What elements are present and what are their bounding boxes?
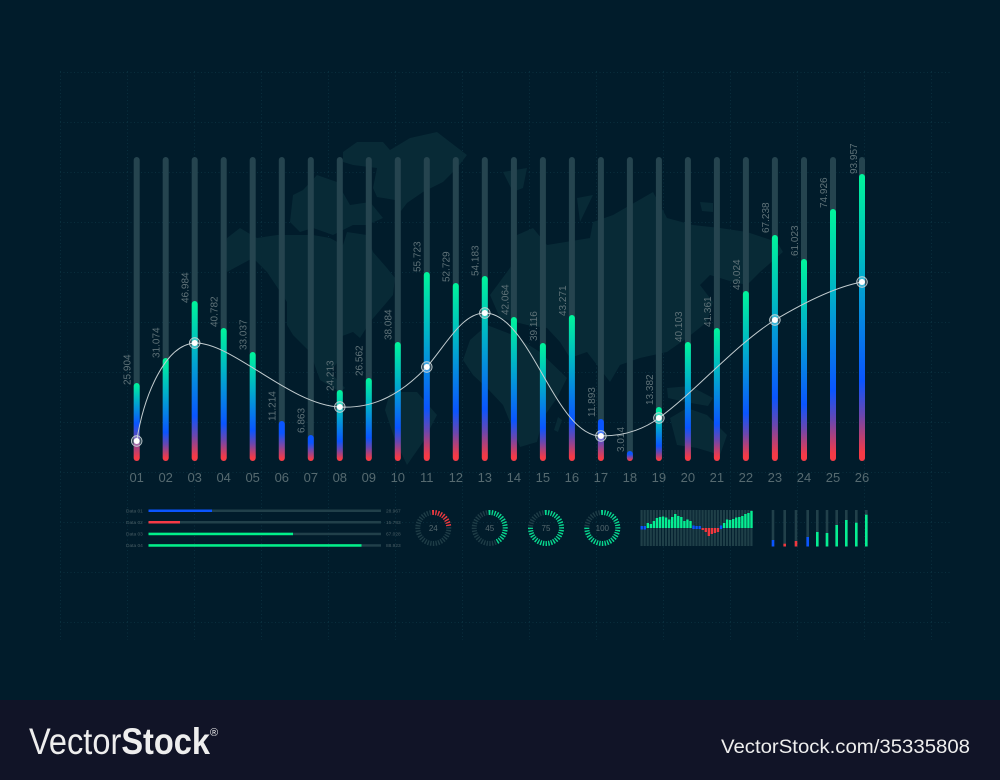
North America (225, 228, 395, 392)
Eurasia (490, 192, 783, 382)
x axis labels: 20 (681, 470, 695, 485)
x axis labels: 15 (536, 470, 550, 485)
registered mark: ® (210, 727, 218, 739)
mini diverging bar chart (640, 511, 753, 536)
rotated value labels: 46.984 (180, 272, 192, 303)
x axis labels: 08 (333, 470, 347, 485)
progress bars panel: 67.028 (386, 532, 401, 538)
x axis labels: 24 (797, 470, 811, 485)
x axis labels: 12 (449, 470, 463, 485)
x axis labels: 07 (304, 470, 318, 485)
progress bars panel: Data 03 (126, 532, 143, 538)
rotated value labels: 40.782 (210, 296, 220, 327)
gauge 75 (530, 512, 562, 544)
footer image id: VectorStock.com/35335808 (721, 736, 970, 758)
ring gauges (418, 512, 618, 544)
progress bars panel (126, 508, 401, 549)
rotated value labels: 13.382 (645, 374, 656, 405)
x axis labels: 21 (710, 470, 724, 485)
Greenland (343, 132, 467, 215)
bar values (134, 174, 865, 461)
rotated value labels: 24.213 (326, 360, 336, 391)
bar chart: main series (122, 143, 869, 485)
rotated value labels: 49.024 (732, 259, 743, 290)
x axis labels: 14 (507, 470, 521, 485)
rotated value labels: 3.014 (616, 427, 627, 452)
rotated value labels: 67.238 (761, 202, 772, 233)
progress bars panel: 88.923 (386, 543, 401, 549)
progress bars panel: Data 02 (126, 520, 143, 526)
x axis labels: 06 (275, 470, 289, 485)
x axis labels: 02 (158, 470, 173, 485)
Novaya Zemlya (577, 195, 593, 222)
rotated value labels: 11.893 (587, 387, 598, 417)
Australia (670, 408, 727, 455)
x axis labels: 13 (478, 470, 492, 485)
rotated value labels: 25.904 (122, 354, 134, 385)
Madagascar (554, 417, 562, 432)
mini vertical bars (772, 510, 868, 546)
x axis labels: 23 (768, 470, 782, 485)
x axis labels: 01 (129, 470, 144, 485)
Indonesia (667, 386, 713, 406)
world map silhouette (225, 132, 783, 465)
x axis labels: 11 (420, 470, 434, 485)
rotated value labels: 26.562 (354, 345, 366, 376)
rotated value labels: 61.023 (790, 225, 801, 256)
x axis labels: 05 (245, 470, 260, 485)
Africa (463, 325, 567, 447)
rotated value labels: 93.957 (849, 143, 860, 174)
rotated value labels: 31.074 (152, 327, 162, 358)
rotated value labels: 33.037 (238, 319, 250, 350)
gauge 24: 24 (429, 524, 438, 533)
gauge 100 (587, 512, 618, 544)
gauge 45 (474, 512, 505, 544)
x axis labels: 22 (739, 470, 753, 485)
rotated value labels: 43.271 (558, 285, 569, 316)
rotated value labels: 6.863 (296, 408, 308, 433)
x axis labels: 18 (623, 470, 637, 485)
gauge 75: 75 (542, 524, 551, 533)
trend line with markers (131, 277, 867, 446)
x axis labels: 25 (826, 470, 840, 485)
rotated value labels: 40.103 (674, 311, 685, 342)
gauge 45: 45 (485, 524, 495, 533)
x axis labels: 26 (855, 470, 869, 485)
bar tracks (134, 157, 865, 461)
rotated value labels: 11.214 (268, 391, 278, 421)
South America (385, 392, 437, 465)
Arctic islands (290, 175, 383, 235)
rotated value labels: 55.723 (412, 241, 424, 272)
x axis labels: 16 (565, 470, 579, 485)
x axis labels: 17 (594, 470, 608, 485)
rotated value labels: 74.926 (819, 177, 830, 208)
footer logo: VectorStock (29, 721, 210, 762)
progress bars panel: Data 04 (126, 543, 143, 549)
background dotted grid (60, 70, 950, 640)
footer bar (0, 700, 1000, 780)
progress bars panel: 28.967 (386, 508, 401, 514)
x axis labels: 04 (216, 470, 231, 485)
rotated value labels: 39.116 (529, 311, 540, 341)
northern Siberian islands (700, 202, 713, 212)
rotated value labels: 52.729 (442, 251, 452, 282)
Svalbard (503, 168, 527, 192)
x axis labels: 09 (362, 470, 376, 485)
rotated value labels: 54.183 (470, 245, 482, 276)
rotated value labels: 41.361 (703, 296, 714, 327)
progress bars panel: Data 01 (126, 508, 143, 514)
x axis labels: 10 (391, 470, 405, 485)
gauge 24 (418, 512, 449, 544)
rotated value labels (122, 143, 860, 452)
gauge 100: 100 (596, 524, 610, 533)
rotated value labels: 42.064 (500, 284, 512, 315)
x axis labels: 03 (187, 470, 202, 485)
x axis labels (129, 470, 869, 485)
x axis labels: 19 (652, 470, 666, 485)
rotated value labels: 38.084 (384, 309, 394, 340)
progress bars panel: 15.783 (386, 520, 401, 526)
